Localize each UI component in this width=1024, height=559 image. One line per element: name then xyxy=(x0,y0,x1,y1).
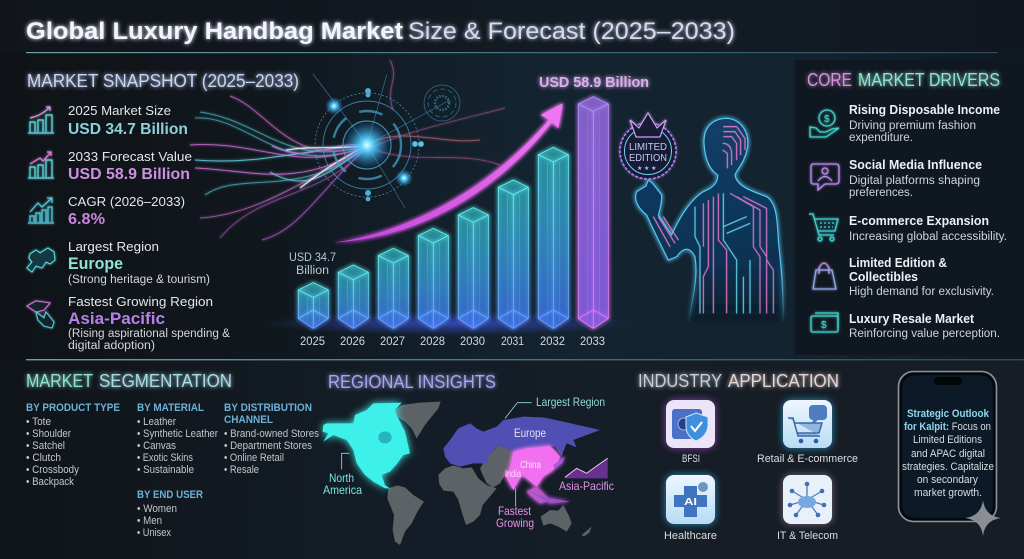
list: by product type: • Backpack xyxy=(26,476,74,488)
icon: small tech ring xyxy=(424,85,460,121)
chart year labels: 2028 xyxy=(420,334,445,348)
heading: core market drivers: MARKET DRIVERS xyxy=(858,70,1000,90)
heading: market segmentation xyxy=(26,370,232,391)
stat: CAGR: 6.8% xyxy=(68,211,105,228)
title xyxy=(26,18,735,45)
heading: market segmentation: SEGMENTATION xyxy=(99,370,232,391)
icon: hand holding coin: $ xyxy=(824,114,830,125)
panel: core market drivers background xyxy=(795,60,1024,355)
stat: 2033 forecast value: USD 58.9 Billion xyxy=(68,166,190,183)
stat: fastest growing region xyxy=(68,295,230,352)
title: Global Luxury Handbag Market xyxy=(26,18,403,45)
list: by product type: • Satchel xyxy=(26,440,65,452)
list: by material: • Leather xyxy=(137,416,176,428)
growth arrow xyxy=(333,103,563,243)
heading: core market drivers xyxy=(807,70,1000,90)
heading: industry application: APPLICATION xyxy=(728,370,839,391)
chart year labels xyxy=(300,334,605,348)
tile: healthcare: AI xyxy=(684,497,697,508)
stat: CAGR xyxy=(68,195,185,228)
heading: market segmentation: MARKET xyxy=(26,370,93,391)
driver: social media influence: Social Media Influence xyxy=(849,157,982,172)
list: by material: BY MATERIAL xyxy=(137,402,204,414)
phone text: Strategic Outlook xyxy=(907,408,990,420)
badge: limited edition: LIMITED xyxy=(629,142,667,153)
stat: fastest growing region: Asia-Pacific xyxy=(68,310,165,328)
chart: Asia-Pacific mini trend xyxy=(565,458,608,478)
driver: limited edition and collectibles: Limited Edition & xyxy=(849,255,947,270)
icon: sparkle xyxy=(965,500,1001,536)
figure silhouette xyxy=(636,118,783,323)
bar 2028 xyxy=(418,228,448,328)
list: by product type: BY PRODUCT TYPE xyxy=(26,402,120,414)
bar 2026 xyxy=(338,265,368,328)
list: by product type: • Clutch xyxy=(26,452,61,464)
icon: shopping cart xyxy=(809,214,838,241)
tile: retail and e-commerce: Retail & E-commerce xyxy=(757,453,858,465)
list: by material: • Canvas xyxy=(137,440,176,452)
panel: industry application xyxy=(638,370,858,542)
list: by distribution channel xyxy=(224,402,319,476)
driver: social media influence xyxy=(849,157,982,199)
list: by product type xyxy=(26,402,120,488)
stat: 2025 market size xyxy=(68,104,188,138)
map label: India: India xyxy=(505,469,521,480)
badge: limited edition: ★ ★ ★ xyxy=(637,165,656,172)
driver: limited edition and collectibles: Collectibles xyxy=(849,269,918,284)
map label: fastest growing xyxy=(496,504,534,530)
illustration: data streams and tech hub xyxy=(190,60,505,240)
heading: core market drivers: CORE xyxy=(807,70,852,90)
stat: CAGR: CAGR (2026–2033) xyxy=(68,195,185,209)
map label: fastest growing: Fastest xyxy=(498,504,532,518)
tile: BFSI: BFSI xyxy=(682,453,700,465)
phone text: for Kalpit: Focus on xyxy=(904,421,991,433)
tile: IT and telecom: IT & Telecom xyxy=(777,530,838,542)
driver: limited edition and collectibles xyxy=(849,255,994,298)
heading: market snapshot: MARKET SNAPSHOT (2025–2033) xyxy=(27,70,299,91)
driver: e-commerce expansion xyxy=(849,213,1007,243)
list: by product type: • Crossbody xyxy=(26,464,79,476)
stat: largest region xyxy=(68,240,210,286)
tile: retail and e-commerce xyxy=(757,400,858,465)
map label: largest region: Largest Region xyxy=(536,395,605,409)
list: by distribution channel: • Brand-owned Stores xyxy=(224,428,319,440)
icon: chat bubble with person xyxy=(811,164,839,190)
stat: 2033 forecast value xyxy=(68,150,192,183)
region: rest of world xyxy=(387,402,592,545)
list: by material: • Synthetic Leather xyxy=(137,428,218,440)
list: by end user: • Women xyxy=(137,503,177,515)
heading: industry application xyxy=(638,370,839,391)
illustration: circuit figure pointing at badge xyxy=(636,118,783,323)
driver: rising disposable income: Rising Disposable Income xyxy=(849,102,1000,117)
map label: North America: North xyxy=(329,471,354,485)
tile: IT and telecom xyxy=(777,475,838,542)
chart year labels: 2031 xyxy=(501,334,524,348)
stat: largest region: Largest Region xyxy=(68,240,159,254)
icon: growth bars pink xyxy=(28,152,54,178)
list: by distribution channel: BY DISTRIBUTION xyxy=(224,402,312,414)
stat: 2025 market size: USD 34.7 Billion xyxy=(68,121,188,138)
list: by end user: • Unisex xyxy=(137,527,171,539)
list: by end user: • Men xyxy=(137,515,162,527)
panel: core market drivers xyxy=(807,70,1007,340)
list: by material: • Exotic Skins xyxy=(137,452,193,464)
chart year labels: 2032 xyxy=(540,334,565,348)
icon: Asia-Pacific outline xyxy=(27,301,54,328)
callout: USD 34.7 Billion: USD 34.7 xyxy=(289,252,336,264)
bar 2032 xyxy=(538,147,568,328)
list: by distribution channel: • Online Retail xyxy=(224,452,284,464)
panel: market snapshot xyxy=(27,70,299,352)
list: by end user: BY END USER xyxy=(137,489,203,501)
phone text: market growth. xyxy=(914,487,982,499)
chart year labels: 2025 xyxy=(300,334,325,348)
region: Asia-Pacific highlight xyxy=(505,446,570,503)
list: by material: • Sustainable xyxy=(137,464,194,476)
list: by distribution channel: • Department Stores xyxy=(224,440,312,452)
driver: e-commerce expansion: E-commerce Expansion xyxy=(849,213,989,228)
list: by product type: • Shoulder xyxy=(26,428,71,440)
phone: strategic outlook xyxy=(898,372,996,522)
phone text: strategies. Capitalize xyxy=(902,461,994,473)
chart year labels: 2027 xyxy=(380,334,405,348)
icon: growth bars teal xyxy=(28,107,54,133)
list: by distribution channel: CHANNEL xyxy=(224,414,273,426)
driver: rising disposable income: expenditure. xyxy=(849,132,913,144)
bar 2025 xyxy=(298,283,328,328)
map label: Asia-Pacific: Asia-Pacific xyxy=(559,479,614,493)
icon: CAGR chart xyxy=(28,198,54,223)
icon: Europe outline xyxy=(27,248,55,272)
map label: fastest growing: Growing xyxy=(496,516,534,530)
bar 2030 xyxy=(458,208,488,328)
map label: North America: America xyxy=(323,483,362,497)
driver: rising disposable income xyxy=(849,102,1000,144)
phone text xyxy=(902,408,994,499)
stat: fastest growing region: Fastest Growing Region xyxy=(68,295,213,309)
map label: North America xyxy=(323,471,362,497)
region: Europe and Russia xyxy=(443,417,600,467)
driver: social media influence: preferences. xyxy=(849,187,913,199)
icon: handbag xyxy=(813,263,836,289)
tile: healthcare: Healthcare xyxy=(664,530,717,542)
list: by end user xyxy=(137,489,203,539)
heading: regional insights: REGIONAL INSIGHTS xyxy=(328,371,496,392)
icon: banknotes: $ xyxy=(821,320,827,331)
list: by distribution channel: • Resale xyxy=(224,464,259,476)
world map xyxy=(323,402,608,545)
callout: USD 34.7 Billion: Billion xyxy=(296,265,329,277)
bar chart: market forecast xyxy=(263,74,649,348)
driver: luxury resale market: Luxury Resale Market xyxy=(849,311,975,326)
stat: largest region: Europe xyxy=(68,255,123,273)
circuit traces xyxy=(653,127,773,313)
chart year labels: 2033 xyxy=(580,334,605,348)
list: by material xyxy=(137,402,218,476)
region: North America xyxy=(323,403,410,488)
driver: rising disposable income: Driving premium fashion xyxy=(849,120,976,132)
map label: China: China xyxy=(520,460,541,471)
phone text: and APAC digital xyxy=(911,448,985,460)
title: Size & Forecast (2025–2033) xyxy=(408,18,735,45)
bar 2033 xyxy=(578,97,608,328)
panel: regional insights xyxy=(323,371,614,545)
icon: hand holding coin xyxy=(810,110,839,137)
panel: market segmentation xyxy=(26,370,319,539)
driver: luxury resale market xyxy=(849,311,1000,340)
driver: limited edition and collectibles: High demand for exclusivity. xyxy=(849,286,994,298)
phone text: on secondary xyxy=(917,474,978,486)
chart year labels: 2030 xyxy=(460,334,485,348)
badge: limited edition: EDITION xyxy=(629,153,667,164)
icon: central tech hub rings xyxy=(313,74,450,208)
driver: luxury resale market: Reinforcing value perception. xyxy=(849,328,1000,340)
bar 2031 xyxy=(498,180,528,328)
heading: industry application: INDUSTRY xyxy=(638,370,722,391)
chart year labels: 2026 xyxy=(340,334,365,348)
stat: fastest growing region: (Rising aspirational spending & xyxy=(68,328,230,340)
list: by product type: • Tote xyxy=(26,416,51,428)
stat: 2033 forecast value: 2033 Forecast Value xyxy=(68,150,192,164)
icon: banknotes xyxy=(811,313,838,332)
stat: fastest growing region: digital adoption) xyxy=(68,340,155,352)
tile: healthcare xyxy=(664,475,717,542)
stat: largest region: (Strong heritage & tourism) xyxy=(68,274,210,286)
stat: 2025 market size: 2025 Market Size xyxy=(68,104,171,118)
callout: USD 34.7 Billion xyxy=(289,252,336,277)
bar 2027 xyxy=(378,248,408,328)
map label: Europe: Europe xyxy=(514,426,546,440)
driver: e-commerce expansion: Increasing global accessibility. xyxy=(849,231,1007,243)
callout: USD 58.9 Billion: USD 58.9 Billion xyxy=(539,74,649,91)
tile: BFSI xyxy=(666,400,715,465)
badge: limited edition xyxy=(620,113,676,179)
phone text: Limited Editions xyxy=(913,434,982,446)
driver: social media influence: Digital platforms shaping xyxy=(849,175,980,187)
